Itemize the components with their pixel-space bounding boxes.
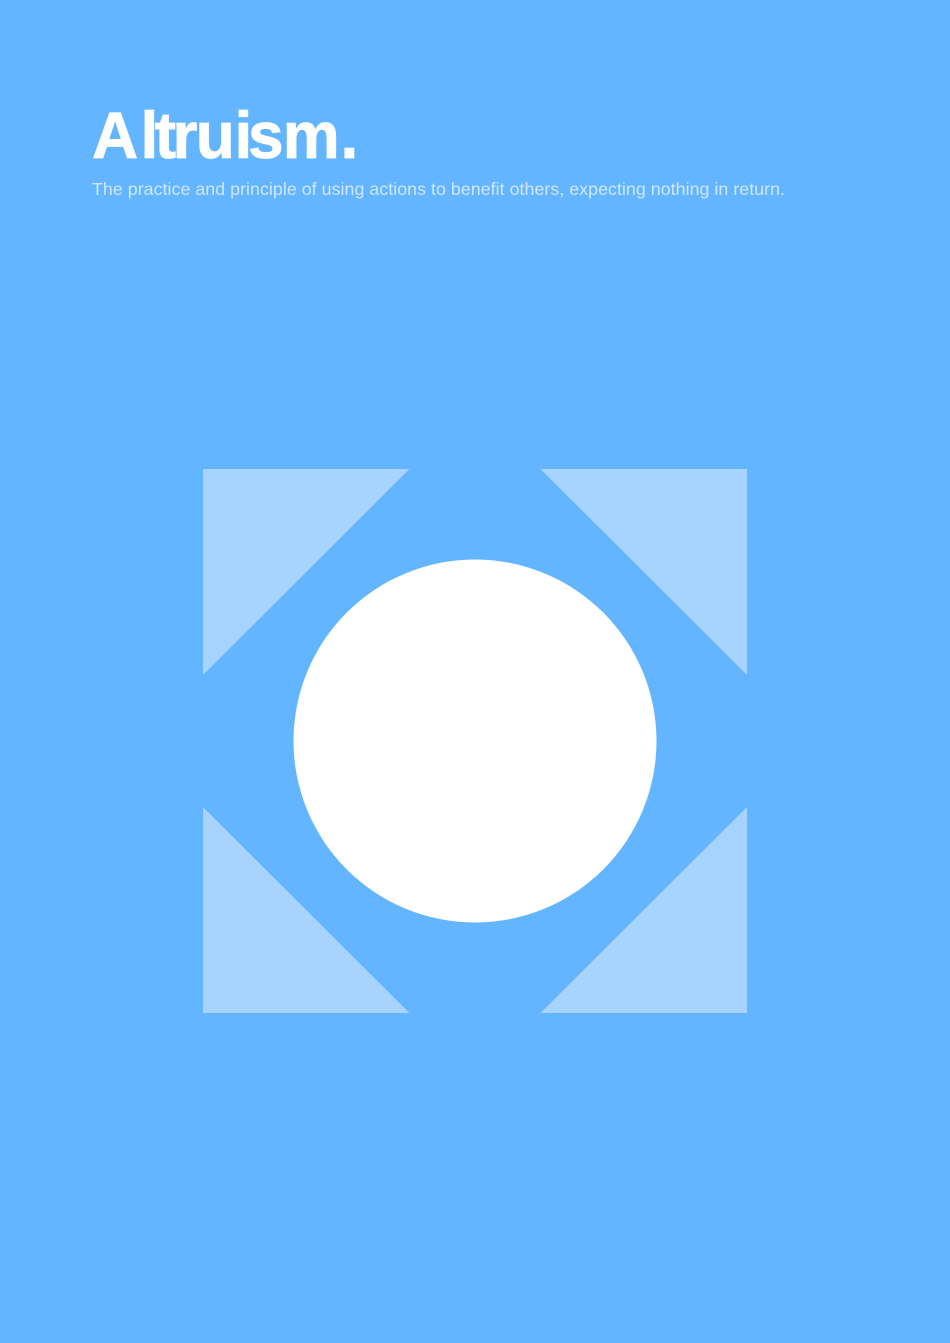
diagram: circle with four corner triangles — [203, 469, 747, 1013]
title: Altruism. — [92, 98, 358, 172]
triangle: bottom right — [540, 807, 747, 1013]
central white circle — [294, 560, 656, 922]
triangle: top right — [540, 469, 747, 675]
triangle: bottom left — [203, 807, 410, 1013]
triangle: top left — [203, 469, 410, 675]
subtitle: The practice and principle of using actions to benefit others, expecting nothing in return. — [92, 179, 785, 199]
